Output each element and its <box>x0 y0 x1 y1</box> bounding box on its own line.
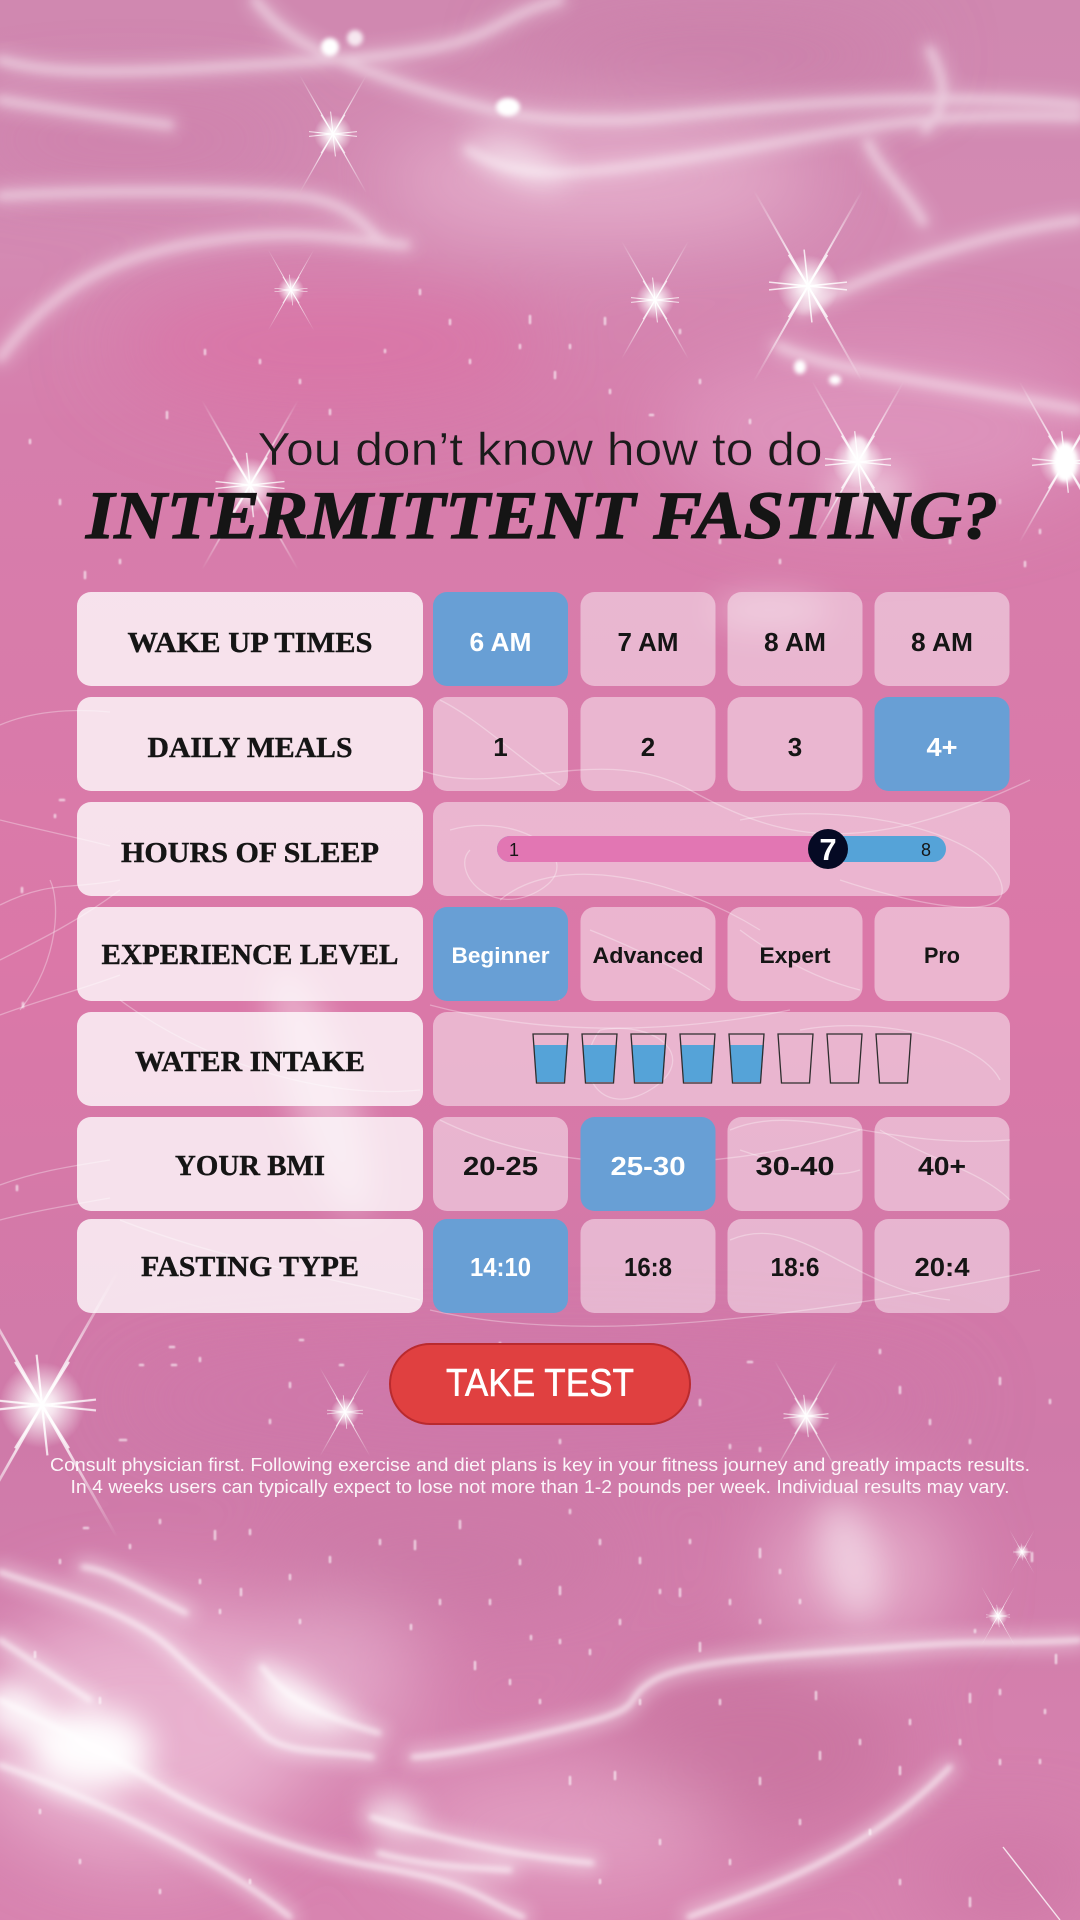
subtitle: You don’t know how to do <box>258 423 822 475</box>
row: wake up times: 8 AM <box>911 627 973 657</box>
row: your bmi <box>77 1117 1010 1211</box>
sleep slider <box>497 829 946 869</box>
row: your bmi: 40+ <box>918 1151 966 1181</box>
row: hours of sleep <box>77 802 1010 896</box>
row: experience level: EXPERIENCE LEVEL <box>102 939 398 971</box>
row: your bmi: YOUR BMI <box>175 1150 325 1182</box>
row: your bmi: 20-25 <box>463 1151 538 1181</box>
row: wake up times: 8 AM <box>764 627 826 657</box>
row: daily meals: 3 <box>788 732 802 762</box>
row: hours of sleep: HOURS OF SLEEP <box>121 837 379 869</box>
row: fasting type <box>77 1219 1010 1313</box>
row: daily meals: 1 <box>493 732 508 762</box>
title: INTERMITTENT FASTING? <box>85 477 998 553</box>
button: take test: TAKE TEST <box>446 1362 634 1405</box>
disclaimer <box>50 1455 1030 1497</box>
row: your bmi: 25-30 <box>610 1151 686 1181</box>
row: water intake <box>77 1012 1010 1106</box>
water glasses: 5 of 8 filled <box>533 1034 911 1083</box>
row: daily meals <box>77 697 1010 791</box>
row: daily meals: 4+ <box>926 732 958 762</box>
row: wake up times: 7 AM <box>618 627 678 657</box>
row: wake up times: 6 AM <box>470 627 532 657</box>
row: experience level: Advanced <box>592 943 704 968</box>
row: experience level: Expert <box>760 943 831 968</box>
sleep slider: 8 <box>921 840 931 860</box>
row: experience level: Beginner <box>452 943 550 968</box>
row: fasting type: 14:10 <box>470 1252 531 1282</box>
questionnaire table <box>77 592 1010 1313</box>
sleep slider: 7 <box>819 832 837 867</box>
row: experience level: Pro <box>924 943 960 968</box>
row: experience level <box>77 907 1010 1001</box>
row: wake up times: WAKE UP TIMES <box>128 627 372 659</box>
sleep slider: 1 <box>509 840 519 860</box>
row: daily meals: 2 <box>641 732 655 762</box>
row: water intake: WATER INTAKE <box>135 1046 365 1078</box>
row: fasting type: 18:6 <box>770 1252 820 1282</box>
row: your bmi: 30-40 <box>756 1151 834 1181</box>
row: daily meals: DAILY MEALS <box>148 732 352 764</box>
button: take test <box>390 1344 690 1424</box>
disclaimer: In 4 weeks users can typically expect to lose not more than 1-2 pounds per week. Individual results may vary. <box>70 1477 1009 1497</box>
row: fasting type: 16:8 <box>624 1252 672 1282</box>
row: wake up times <box>77 592 1010 686</box>
row: fasting type: 20:4 <box>914 1252 970 1282</box>
row: fasting type: FASTING TYPE <box>141 1251 359 1283</box>
disclaimer: Consult physician first. Following exercise and diet plans is key in your fitness journey and greatly impacts results. <box>50 1455 1030 1475</box>
